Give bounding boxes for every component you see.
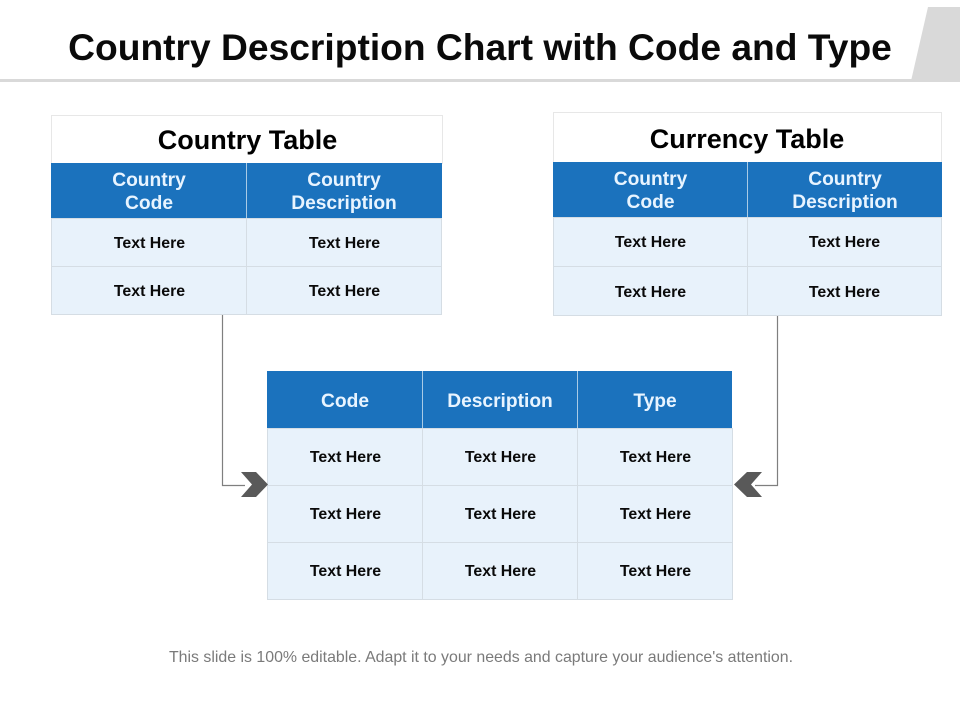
code table rows: Text Here (620, 506, 691, 523)
code table header row (267, 371, 732, 428)
code table header row: Code (321, 391, 369, 412)
country table header row (51, 163, 442, 218)
country table rows: Text Here (309, 235, 380, 252)
country table header row: Code (125, 193, 173, 214)
header band (0, 7, 960, 82)
panel: country table (51, 116, 442, 314)
country table header row: Country (112, 170, 186, 191)
country table rows: Text Here (309, 283, 380, 300)
currency table rows (554, 218, 942, 316)
footer note: This slide is 100% editable. Adapt it to your needs and capture your audience's attention. (169, 649, 793, 666)
currency table rows: Text Here (615, 234, 686, 251)
country table rows: Text Here (114, 235, 185, 252)
country table header row: Country (307, 170, 381, 191)
connector: currency table to code table (755, 316, 778, 486)
code table rows: Text Here (310, 449, 381, 466)
code table rows: Text Here (620, 563, 691, 580)
code table rows: Text Here (310, 563, 381, 580)
panel: currency table (553, 112, 942, 316)
code table header row: Description (447, 391, 553, 412)
icon: right chevron arrow (241, 472, 268, 497)
title: Country Description Chart with Code and Type (68, 26, 892, 68)
code table header row: Type (633, 391, 677, 412)
code table rows (268, 428, 732, 600)
code table rows: Text Here (465, 449, 536, 466)
country table header row: Description (291, 193, 397, 214)
code table rows: Text Here (310, 506, 381, 523)
code table rows: Text Here (620, 449, 691, 466)
currency table heading: Currency Table (650, 124, 844, 154)
currency table header row: Code (627, 192, 675, 213)
country table heading: Country Table (158, 125, 337, 155)
code table rows: Text Here (465, 506, 536, 523)
currency table header row: Description (792, 192, 898, 213)
panel: code description type table (267, 371, 732, 600)
currency table header row (553, 162, 942, 217)
code table rows: Text Here (465, 563, 536, 580)
connector: country table to code table (222, 315, 245, 486)
currency table header row: Country (808, 169, 882, 190)
currency table rows: Text Here (615, 284, 686, 301)
country table rows (52, 218, 442, 314)
icon: left chevron arrow (734, 472, 762, 497)
currency table rows: Text Here (809, 234, 880, 251)
currency table header row: Country (614, 169, 688, 190)
currency table rows: Text Here (809, 284, 880, 301)
country table rows: Text Here (114, 283, 185, 300)
